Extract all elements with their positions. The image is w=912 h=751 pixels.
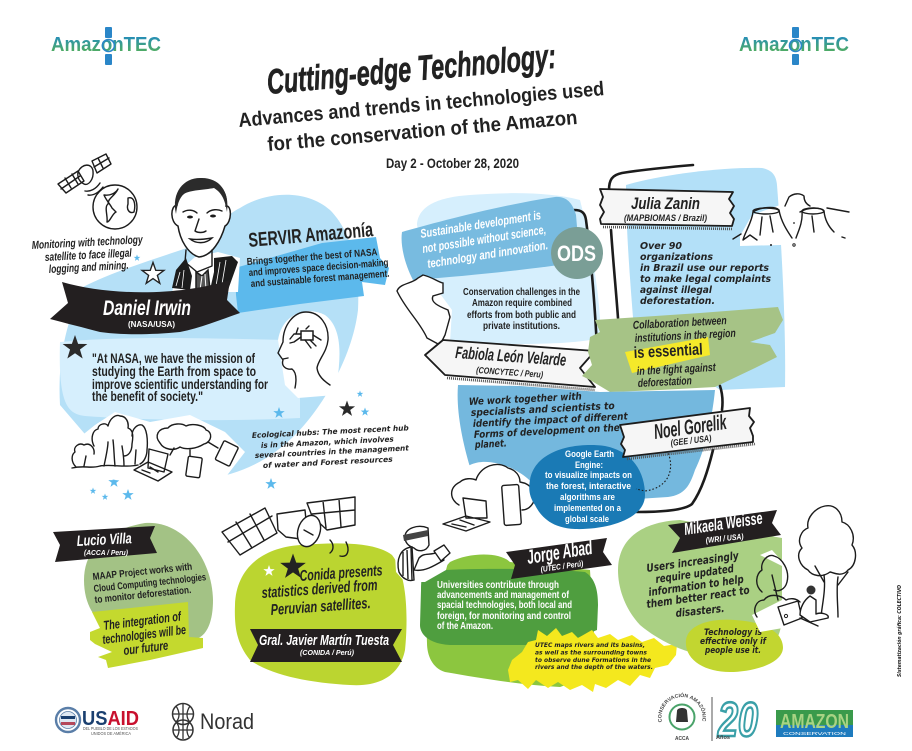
text: users increasingly: disasters. xyxy=(675,602,725,620)
text: Conida presents: Conida presents xyxy=(299,562,383,585)
ribbon: Julia Zanin: (MAPBIOMAS / Brazil) xyxy=(624,213,707,223)
logo: AmazonTEC right xyxy=(739,27,849,65)
ribbon: Jorge Abad: Jorge Abad xyxy=(525,537,594,569)
portrait: Daniel Irwin xyxy=(172,178,240,292)
highlight yellow xyxy=(625,337,710,373)
text: we work together: Forms of development on the xyxy=(474,423,620,441)
ribbon: Jorge Abad xyxy=(506,537,612,579)
title xyxy=(238,37,605,156)
text: quote: studying the Earth from space to xyxy=(92,364,256,379)
text: over 90 organizations: organizations xyxy=(640,252,713,263)
frame line xyxy=(609,165,693,318)
callout: Google Earth Engine: Engine: xyxy=(575,460,603,471)
text: sustainable xyxy=(419,208,549,271)
text: MAAP: to monitor deforestation. xyxy=(94,585,192,606)
text: sustainable: not possible without science, xyxy=(421,223,547,256)
text: quote: "At NASA, we have the mission of xyxy=(92,351,255,366)
icon: tree stumps xyxy=(733,193,850,246)
logo: AmazonTEC left xyxy=(51,27,161,65)
ribbon: Fabiola Leon Velarde: (CONCYTEC / Peru) xyxy=(476,365,543,380)
brush stroke green xyxy=(582,307,783,392)
ribbon: Noel Gorelik: Noel Gorelik xyxy=(652,411,729,444)
panel: Conida xyxy=(235,543,407,685)
text: we work together: specialists and scientists to xyxy=(471,401,615,419)
logo: USAID: UNIDOS DE AMÉRICA xyxy=(91,730,132,736)
text: over 90 organizations: to make legal complaints xyxy=(640,274,771,285)
icon: black star xyxy=(280,554,306,578)
banner: Daniel Irwin: Daniel Irwin xyxy=(103,297,191,320)
logo: Amazon Conservation: CONSERVATION xyxy=(783,731,847,737)
text: users increasingly: require updated xyxy=(655,562,735,586)
text: MAAP xyxy=(92,562,207,606)
divider and 20 anos logo xyxy=(712,694,758,747)
callout: Google Earth Engine: algorithms are xyxy=(560,492,615,503)
ribbon: Noel Gorelik: (GEE / USA) xyxy=(670,433,712,448)
text: collaboration: is essential xyxy=(633,341,703,362)
text: conservation challenges xyxy=(463,287,580,332)
icon: blue and black stars xyxy=(90,390,369,500)
divider and 20 anos logo: Años xyxy=(716,735,730,741)
badge: ODS: ODS xyxy=(557,241,596,266)
text: over 90 organizations: against illegal xyxy=(640,285,713,296)
text: ecological hubs: is in the Amazon, which involves xyxy=(261,434,394,450)
logo: Conservacion Amazonica ACCA: CONSERVACIÓN AMAZÓNICA xyxy=(658,692,706,722)
text: collaboration: institutions in the region xyxy=(635,328,736,345)
subtitle xyxy=(238,78,605,156)
ribbon xyxy=(53,526,157,562)
ribbon: Javier Martin Tuesta: (CONIDA / Perú) xyxy=(300,648,354,657)
icon: white star xyxy=(263,565,275,576)
logo: USAID: DEL PUEBLO DE LOS ESTADOS xyxy=(83,726,138,731)
background blob light blue xyxy=(60,195,358,479)
panel: Daniel Irwin / SERVIR Amazonia xyxy=(32,154,409,500)
background blue xyxy=(626,168,785,390)
callout: Google Earth Engine: the forest, interactive xyxy=(546,481,631,492)
text: integration: The integration of xyxy=(103,608,183,633)
icon: head with chip xyxy=(278,311,339,398)
icon: star outline xyxy=(142,262,164,283)
subtitle: for the conservation of the Amazon xyxy=(267,107,578,156)
background green blob xyxy=(84,523,213,640)
ribbon: Jorge Abad: (UTEC / Perú) xyxy=(540,559,584,574)
frame line xyxy=(637,386,723,512)
ribbon: (WRI / USA) xyxy=(705,532,744,545)
callout: technology effective: effective only if xyxy=(700,636,767,646)
date: Day 2 - October 28, 2020 xyxy=(386,155,519,171)
text: collaboration: in the fight against xyxy=(637,362,717,378)
text: we work together: identify the impact of different xyxy=(473,411,629,430)
icon: satellite xyxy=(58,154,111,195)
text: ecological hubs: of water and Forest resources xyxy=(263,455,393,470)
callout: Google Earth Engine: Google Earth xyxy=(565,449,614,460)
text: users increasingly: Users increasingly xyxy=(646,549,740,575)
text: MAAP: Cloud Computing technologies xyxy=(93,572,207,595)
text: ecological hubs xyxy=(252,423,409,470)
logo: USAID: USAID xyxy=(82,708,139,730)
light quote panel xyxy=(60,338,300,420)
text: quote: the benefit of society." xyxy=(92,389,203,404)
text: over 90 organizations xyxy=(640,241,771,307)
text: conservation challenges: efforts from both public and xyxy=(467,310,576,321)
logo: Conservacion Amazonica ACCA xyxy=(658,692,706,742)
frame line xyxy=(574,210,597,348)
text: over 90 organizations: deforestation. xyxy=(640,296,715,307)
brush stroke behind SERVIR text xyxy=(235,237,389,313)
text: quote xyxy=(92,351,269,404)
dark green panel xyxy=(420,569,598,645)
text: we work together: planet. xyxy=(474,438,507,451)
background light green blob xyxy=(425,554,595,687)
text: universities xyxy=(437,580,572,632)
callout: Google Earth Engine: global scale xyxy=(565,514,609,525)
text: users increasingly: them better react to xyxy=(646,584,751,611)
icon: Peru map xyxy=(397,275,450,345)
text: quote: improve scientific understanding for xyxy=(92,377,269,392)
text: collaboration: Collaboration between xyxy=(633,315,727,332)
callout: technology effective: people use it. xyxy=(704,645,761,655)
heading: SERVIR Amazonia: SERVIR Amazonía xyxy=(248,219,375,252)
callout: yellow burst UTEC: as well as the surrounding towns xyxy=(535,648,647,656)
ribbon: Noel Gorelik xyxy=(620,408,755,459)
icon: trees and devices xyxy=(68,412,245,482)
text: MAAP: MAAP Project works with xyxy=(92,562,193,583)
text: universities: advancements and management of xyxy=(437,590,570,601)
text: sustainable: technology and innovation. xyxy=(426,238,549,271)
logo: AmazonTEC left: AmazonTEC xyxy=(51,34,161,56)
text: universities: of the Amazon. xyxy=(437,621,493,632)
text: universities: Universities contribute through xyxy=(437,580,559,591)
panel: Julia Zanin xyxy=(600,165,850,390)
text: monitoring xyxy=(32,234,143,276)
text: universities: spacial technologies, both local and xyxy=(437,600,572,611)
icon: black star xyxy=(63,335,87,359)
text: universities: foreign, for monitoring and control xyxy=(437,611,571,622)
text: monitoring: satellite to face illegal xyxy=(45,247,133,264)
text: Conida presents: Peruvian satellites. xyxy=(270,595,371,619)
banner: Daniel Irwin xyxy=(50,280,240,334)
ribbon: Javier Martin Tuesta xyxy=(250,629,402,662)
background lime blob xyxy=(235,543,407,685)
text: over 90 organizations: Over 90 xyxy=(640,241,682,252)
subtitle: Advances and trends in technologies used xyxy=(238,78,605,132)
text: SERVIR description: and improves space decision-making xyxy=(248,258,389,279)
text: collaboration xyxy=(633,315,736,390)
panel: Fabiola Leon Velarde / ODS xyxy=(397,193,603,390)
callout: yellow burst UTEC: to observe dune Formations in the xyxy=(535,656,652,664)
background light blue xyxy=(417,193,601,344)
text: SERVIR description: and sustainable forest management. xyxy=(250,269,390,290)
badge: ODS xyxy=(551,227,603,279)
ribbon: Lucio Villa xyxy=(76,530,132,550)
logo: Norad: Norad xyxy=(200,709,254,734)
text: we work together: We work together with xyxy=(469,391,582,408)
text: integration xyxy=(102,608,187,658)
logo: AmazonTEC right: AmazonTEC xyxy=(739,34,849,56)
callout: yellow burst UTEC: rivers and the depth of the waters. xyxy=(535,663,653,671)
ribbon: Julia Zanin: Julia Zanin xyxy=(631,194,700,213)
text: ecological hubs: several countries in the management xyxy=(255,443,409,460)
ribbon: Javier Martin Tuesta: Gral. Javier Martín Tuesta xyxy=(259,632,389,649)
banner: Daniel Irwin: (NASA/USA) xyxy=(128,319,175,329)
panel: Jorge Abad xyxy=(420,537,677,692)
brush stroke lime xyxy=(90,602,203,668)
text: over 90 organizations: in Brazil use our reports xyxy=(640,263,769,274)
text: monitoring: Monitoring with technology xyxy=(32,234,143,252)
ribbon: Julia Zanin xyxy=(600,189,734,229)
text: we work together xyxy=(469,391,629,451)
panel: Mikaela Weisse xyxy=(618,506,855,672)
text: integration: our future xyxy=(123,638,169,658)
callout: Google Earth Engine xyxy=(529,445,645,529)
divider and 20 anos logo: 20 xyxy=(717,694,758,747)
text: collaboration: deforestation xyxy=(638,375,692,390)
text: Conida presents: statistics derived from xyxy=(261,577,378,602)
callout: Google Earth Engine: to visualize impacts on xyxy=(545,470,632,481)
text: Conida presents xyxy=(261,562,383,619)
icon: globe xyxy=(93,185,137,229)
ribbon xyxy=(668,508,781,553)
panel: collaboration callout xyxy=(582,307,783,392)
credit: vertical text: Sistematización gráfica: COLECTIVO xyxy=(896,585,903,677)
title: Cutting-edge Technology: xyxy=(265,37,558,102)
text: conservation challenges: Conservation challenges in the xyxy=(463,287,580,298)
text: SERVIR description xyxy=(246,247,390,290)
text: conservation challenges: Amazon require combined xyxy=(472,298,572,309)
logo: Conservacion Amazonica ACCA: ACCA xyxy=(675,736,689,742)
logo: USAID xyxy=(56,708,139,736)
text: integration: technologies will be xyxy=(102,622,187,647)
icon: cloud and devices xyxy=(442,462,540,535)
background blue xyxy=(458,385,715,500)
icon: trees and person with laptop xyxy=(752,506,855,632)
text: SERVIR description: Brings together the best of NASA xyxy=(246,247,378,268)
ribbon: (ACCA / Peru) xyxy=(84,548,128,557)
banner blue xyxy=(402,197,580,280)
logo: Amazon Conservation: AMAZON xyxy=(780,711,849,733)
panel: Lucio Villa xyxy=(53,523,213,668)
callout: technology effective: Technology is xyxy=(704,627,762,637)
callout: technology effective xyxy=(686,620,783,672)
text: users increasingly: information to help xyxy=(648,573,745,599)
icon: large satellite xyxy=(222,497,355,556)
text: conservation challenges: private institutions. xyxy=(483,321,560,332)
text: users increasingly xyxy=(646,549,751,620)
icon: person with phone xyxy=(395,522,452,582)
callout: yellow burst UTEC: UTEC maps rivers and its basins, xyxy=(535,641,645,649)
ribbon: Mikaela Weisse xyxy=(683,508,764,539)
icon: small blue star xyxy=(134,254,140,261)
callout: yellow burst UTEC xyxy=(508,628,677,692)
ribbon: Fabiola Leon Velarde xyxy=(425,340,595,390)
panel: Noel Gorelik xyxy=(442,385,755,535)
background green blob xyxy=(618,520,782,660)
text: ecological hubs: Ecological hubs: The most recent hub xyxy=(252,423,409,440)
logo: Norad xyxy=(172,704,254,740)
text: monitoring: logging and mining. xyxy=(49,260,129,276)
callout: Google Earth Engine: implemented on a xyxy=(554,503,622,514)
arrow: dotted from Noel Gorelik to Google Earth Engine xyxy=(636,450,671,491)
ribbon: Fabiola Leon Velarde: Fabiola León Velarde xyxy=(455,343,567,370)
logo: Amazon Conservation xyxy=(776,710,853,737)
text: sustainable: Sustainable development is xyxy=(419,208,542,241)
